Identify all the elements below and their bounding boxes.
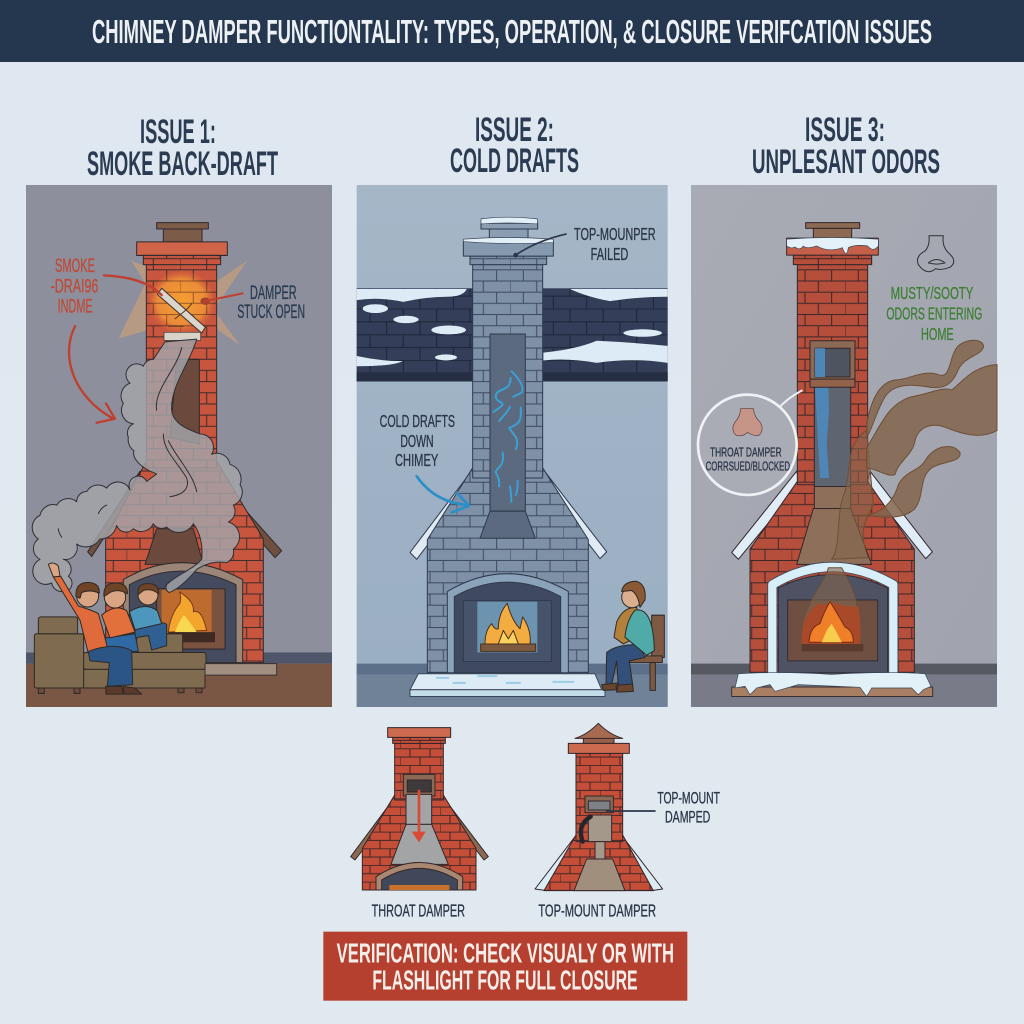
odor smoke ribbons bbox=[802, 340, 997, 627]
label: top-mount failed bbox=[574, 224, 656, 264]
fire bbox=[162, 590, 215, 642]
label: throat damper corroded: CORRSUED/BLOCKED bbox=[706, 458, 790, 474]
child in orange bbox=[105, 634, 138, 652]
label: cold drafts down chimey: CHIMEY bbox=[395, 450, 438, 470]
smoke cloud bbox=[32, 339, 242, 592]
family on couch bbox=[48, 563, 167, 694]
label: musty sooty odors: MUSTY/SOOTY bbox=[891, 283, 973, 303]
roof band with snow bbox=[357, 288, 668, 381]
heading: issue 1: SMOKE BACK-DRAFT bbox=[87, 145, 278, 183]
icon: pink nose bbox=[733, 409, 762, 436]
label: top-mount damped: TOP-MOUNT bbox=[657, 789, 720, 808]
callout: throat damper bbox=[698, 391, 802, 495]
label: musty sooty odors bbox=[886, 283, 982, 344]
cold person in chair bbox=[602, 581, 664, 692]
label: cold drafts down chimey bbox=[380, 411, 455, 470]
fireplace with snow bbox=[772, 567, 893, 673]
label: top-mount failed: TOP-MOUNPER bbox=[574, 224, 656, 244]
fireplace bbox=[123, 563, 243, 663]
damper glow on bricks bbox=[147, 270, 216, 334]
label: throat damper corroded: THROAT DAMPER bbox=[710, 444, 782, 459]
verification banner: FLASHLIGHT FOR FULL CLOSURE bbox=[372, 964, 638, 995]
chimney structure bbox=[88, 223, 282, 663]
heading: issue 1: ISSUE 1: bbox=[140, 113, 216, 151]
label: smoke drafting in home: SMOKE bbox=[55, 255, 95, 276]
crown snow bbox=[787, 237, 878, 254]
diagrams: damper types bbox=[323, 723, 720, 1001]
arrow: damper leader bbox=[205, 293, 243, 301]
label: smoke drafting in home: -DRAI96 bbox=[51, 276, 98, 297]
panel: issue 3 unpleasant odors bbox=[691, 185, 997, 707]
damper stuck open plate bbox=[157, 288, 210, 340]
heading: issue 3 bbox=[752, 111, 940, 181]
hearth bbox=[410, 674, 605, 696]
hearth with snow bbox=[732, 673, 933, 696]
fire bbox=[481, 603, 536, 651]
glow rays behind chimney bbox=[119, 261, 247, 345]
label: damper stuck open bbox=[237, 282, 305, 322]
grey brick chimney bbox=[410, 223, 607, 673]
panel: issue 2 cold drafts bbox=[357, 185, 668, 707]
leader: top-mount bbox=[607, 808, 655, 813]
title bar bbox=[0, 0, 1024, 62]
label: cold drafts down chimey: COLD DRAFTS bbox=[380, 411, 455, 431]
label: top-mount damper: TOP-MOUNT DAMPER bbox=[538, 901, 656, 921]
heading: issue 1 bbox=[87, 113, 278, 183]
label: damper stuck open: DAMPER bbox=[250, 282, 297, 303]
label: musty sooty odors: HOME bbox=[921, 324, 954, 344]
man with raised arm bbox=[53, 576, 107, 653]
arrow: cold draft bbox=[417, 476, 469, 513]
label: smoke drafting in home bbox=[51, 255, 98, 317]
child in blue bbox=[135, 623, 167, 650]
fireplace bbox=[447, 574, 568, 673]
heading: issue 2: ISSUE 2: bbox=[475, 111, 554, 149]
fire bbox=[802, 602, 863, 651]
diagram: throat damper bbox=[351, 728, 488, 890]
label: throat damper: THROAT DAMPER bbox=[372, 901, 465, 921]
verification banner bbox=[323, 932, 687, 1001]
verification banner: VERIFICATION: CHECK VISUALY OR WITH bbox=[337, 937, 674, 968]
label: top-mount failed: FAILED bbox=[591, 244, 628, 264]
label: smoke drafting in home: INDME bbox=[58, 296, 93, 317]
label: top-mount damped: DAMPED bbox=[665, 808, 710, 827]
label: damper stuck open: STUCK OPEN bbox=[237, 301, 305, 322]
heading: issue 2: COLD DRAFTS bbox=[450, 142, 579, 180]
heading: issue 3: ISSUE 3: bbox=[805, 111, 885, 149]
hearth bbox=[205, 664, 277, 675]
red brick chimney bbox=[732, 223, 932, 673]
heading: issue 2 bbox=[450, 111, 579, 180]
chimney snow bbox=[463, 217, 553, 244]
leader: top mount bbox=[513, 234, 566, 257]
panel: issue 1 smoke back-draft bbox=[26, 185, 332, 707]
icon: nose outline bbox=[917, 236, 954, 272]
couch bbox=[34, 617, 206, 693]
diagram: top-mount damper bbox=[535, 723, 663, 891]
label: cold drafts down chimey: DOWN bbox=[400, 431, 434, 451]
label: throat damper corroded bbox=[706, 444, 790, 474]
label: top-mount damped bbox=[657, 789, 720, 827]
arrows: smoke bbox=[69, 275, 162, 423]
cold draft squiggles bbox=[493, 371, 523, 502]
